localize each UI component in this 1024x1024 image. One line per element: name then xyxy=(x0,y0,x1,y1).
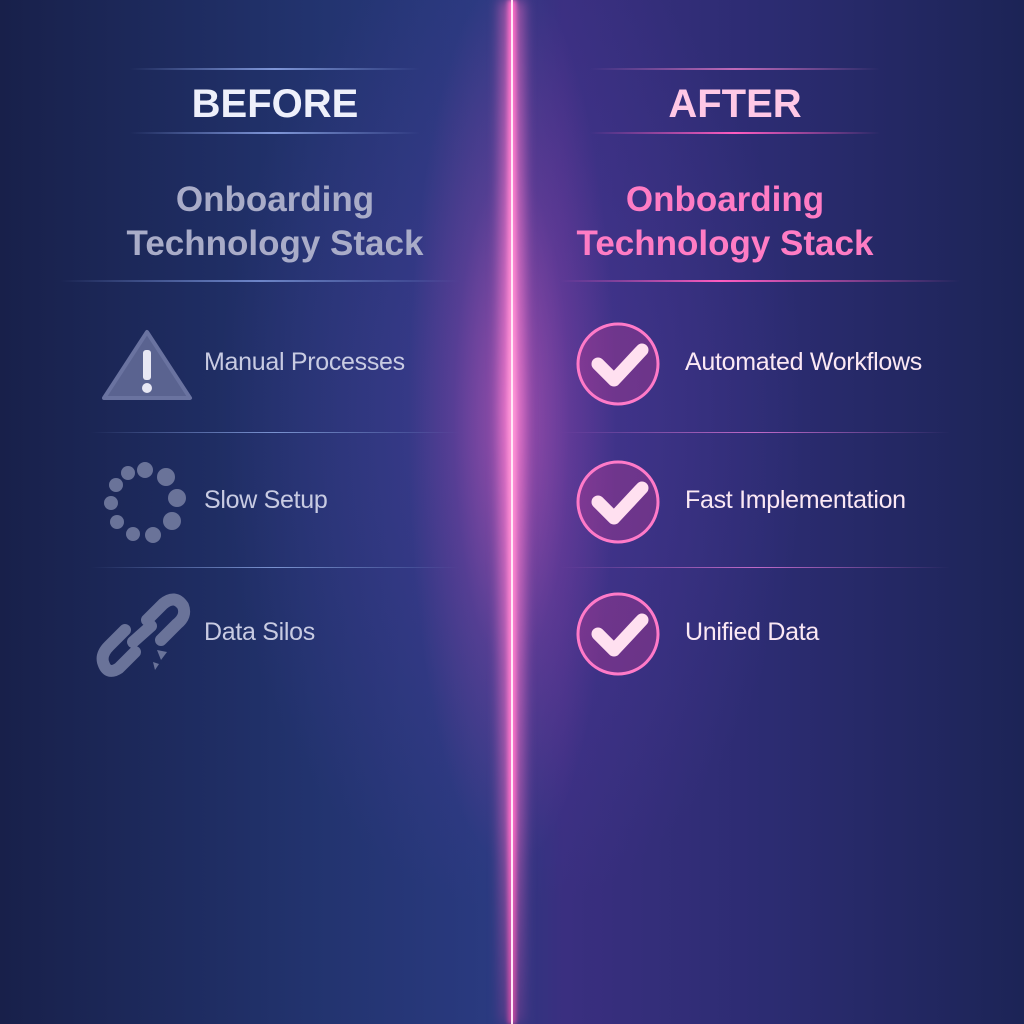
subtitle: before: Onboarding xyxy=(176,180,374,219)
icon: warning xyxy=(102,330,192,400)
label: Data Silos: Data Silos xyxy=(204,618,315,646)
subtitle: before: Technology Stack xyxy=(127,224,423,263)
label: Manual Processes: Manual Processes xyxy=(204,348,405,376)
icon: check 3 xyxy=(576,592,660,676)
label: Unified Data: Unified Data xyxy=(685,618,819,646)
icon: check 2 xyxy=(576,460,660,544)
subtitle: before xyxy=(126,180,424,263)
label: Slow Setup: Slow Setup xyxy=(204,486,327,514)
icon: check 1 xyxy=(576,322,660,406)
subtitle: after xyxy=(576,180,874,263)
label: Fast Implementation: Fast Implementation xyxy=(685,486,906,514)
title: BEFORE: BEFORE xyxy=(192,82,358,126)
center glowing line xyxy=(362,0,662,1024)
subtitle: after: Onboarding xyxy=(626,180,824,219)
title: AFTER: AFTER xyxy=(668,82,802,126)
icon: loading xyxy=(104,462,186,543)
icon: broken link xyxy=(96,594,190,677)
label: Automated Workflows: Automated Workflows xyxy=(685,348,922,376)
subtitle: after: Technology Stack xyxy=(577,224,873,263)
